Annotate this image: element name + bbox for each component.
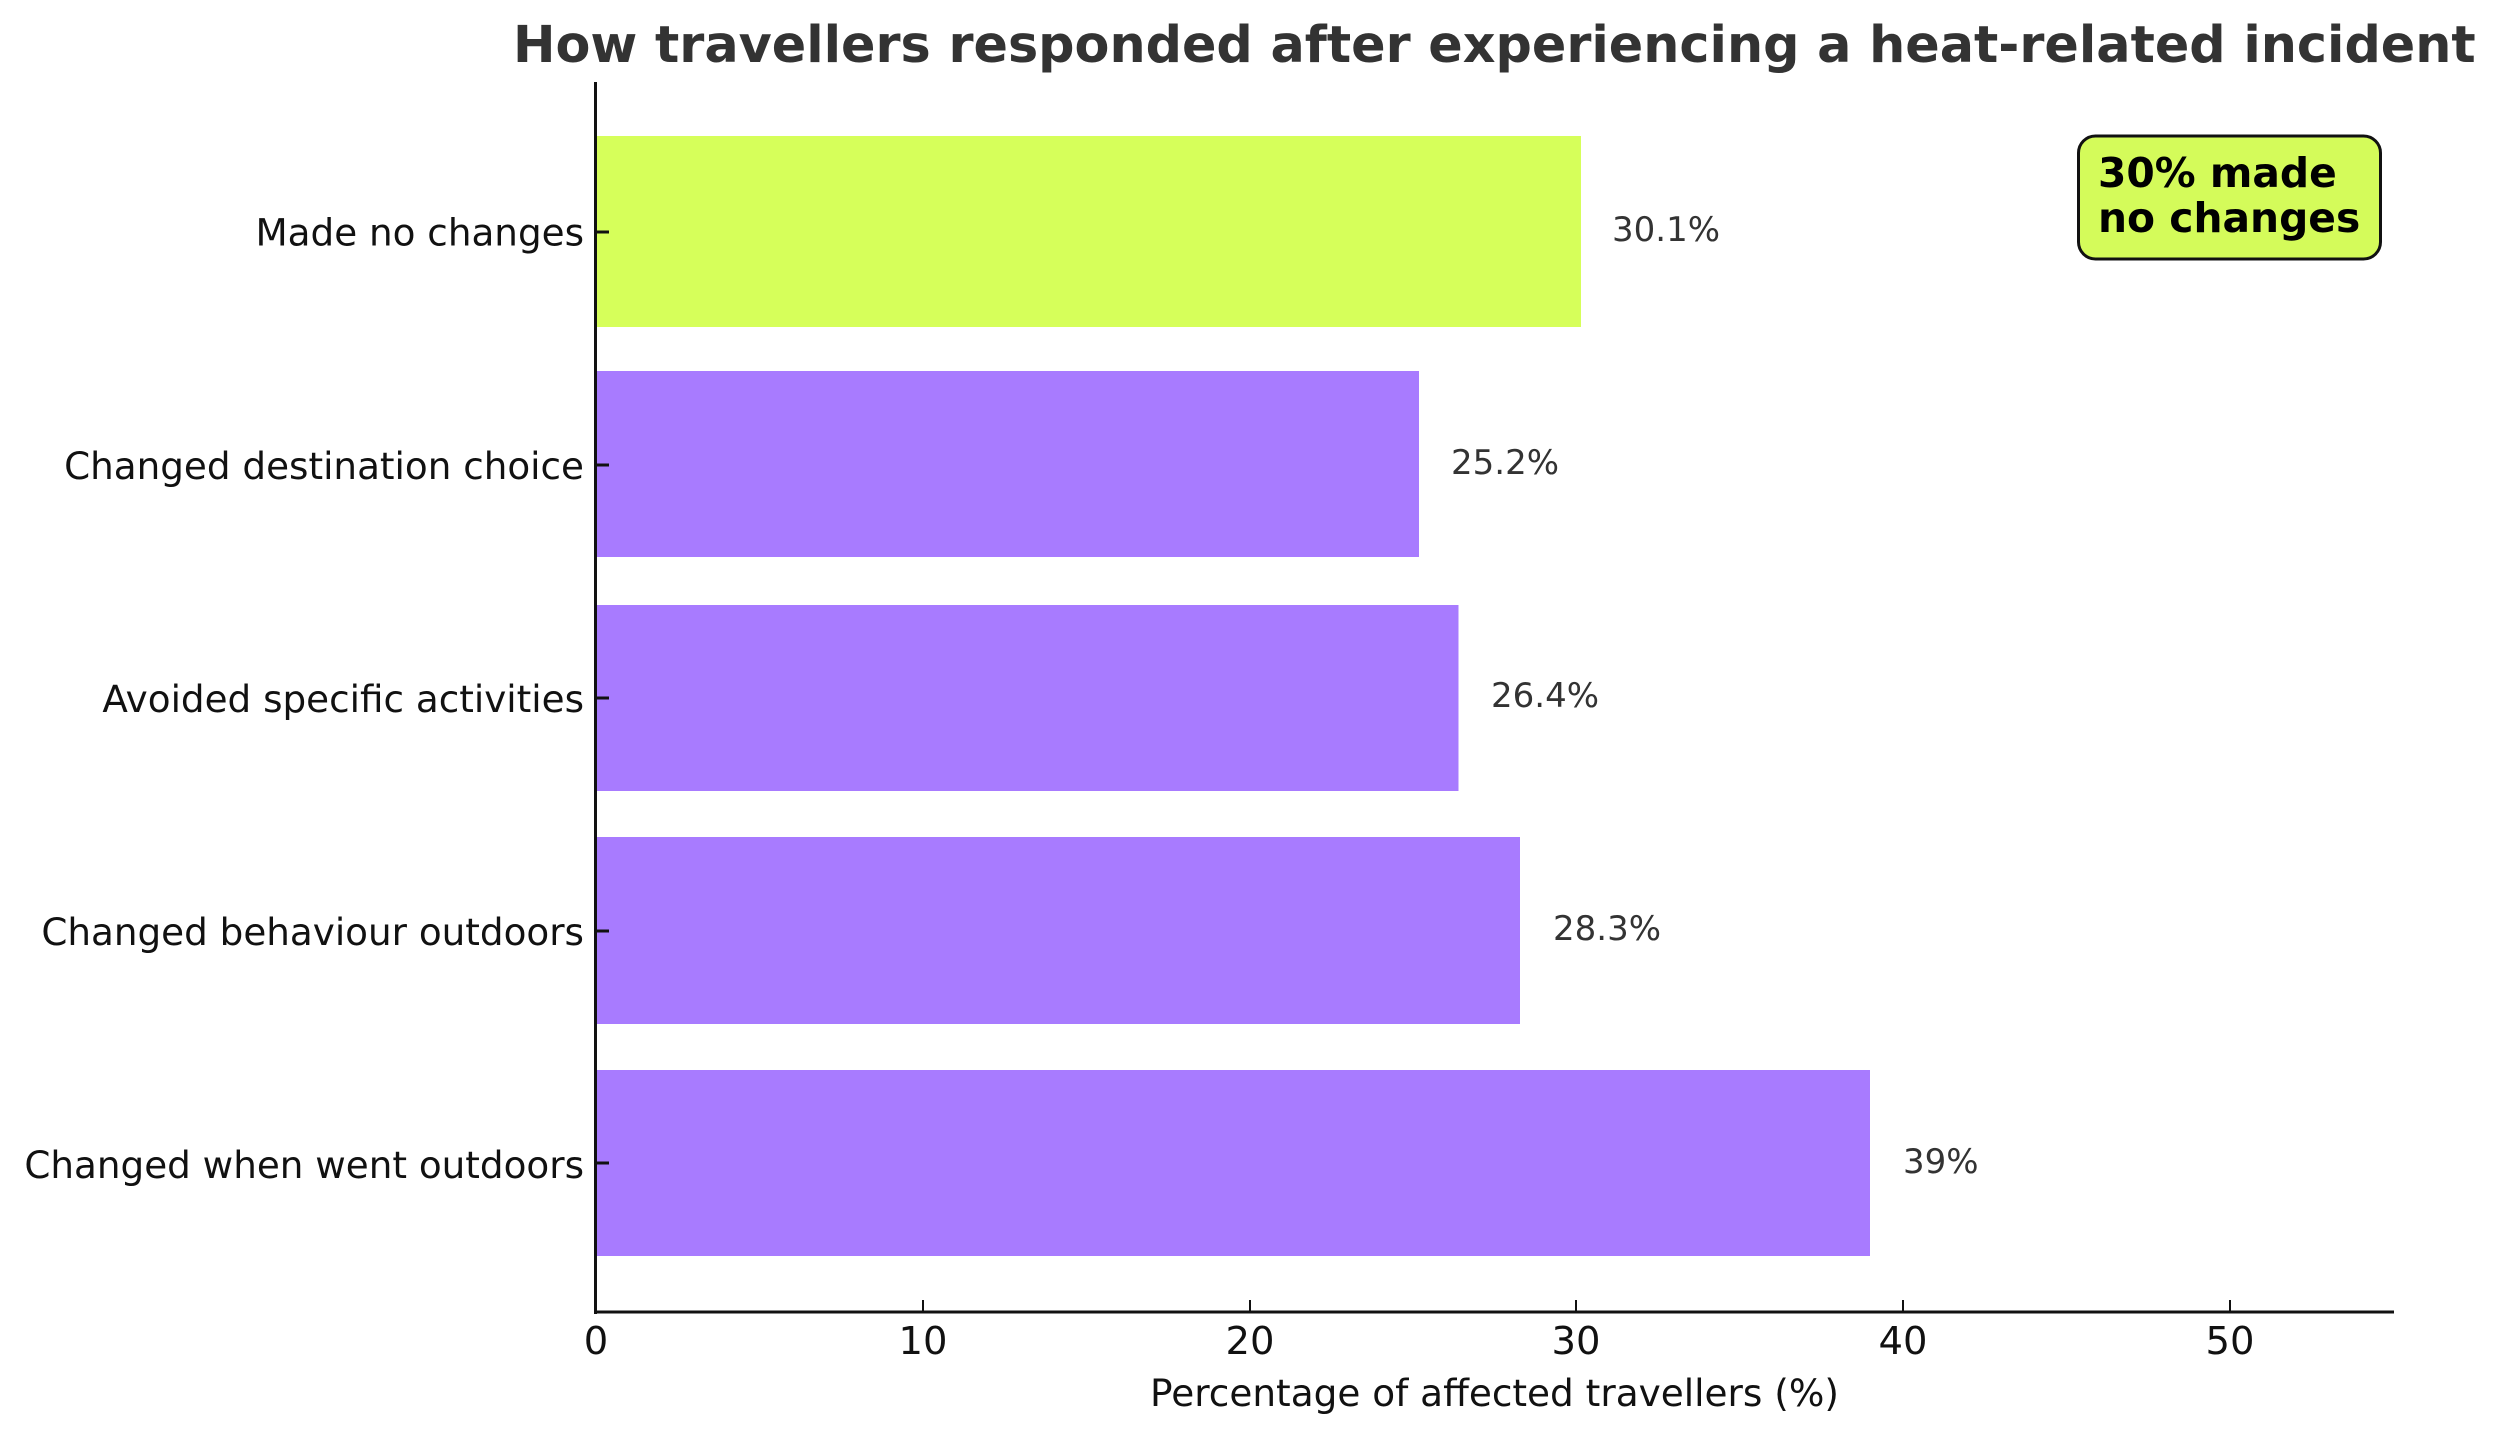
callout: 30% made [2098,149,2337,197]
y axis with category labels [24,82,609,1314]
bar: Changed when went outdoors [596,1070,1979,1256]
bar: Changed destination choice [596,371,1559,557]
x axis with tick labels [584,1300,2394,1364]
y axis with category labels: Avoided specific activities [102,677,584,721]
callout [2078,136,2380,259]
x axis with tick labels: 10 [898,1319,948,1364]
x axis with tick labels: 30 [1552,1319,1600,1364]
bar: Changed destination choice: 25.2% [1451,443,1559,483]
callout: no changes [2098,194,2360,242]
bar: Made no changes: 30.1% [1612,210,1720,250]
y axis with category labels: Changed when went outdoors [24,1143,584,1187]
x axis with tick labels: 20 [1226,1319,1274,1364]
y axis with category labels: Changed behaviour outdoors [41,910,584,954]
x axis with tick labels: 40 [1878,1319,1928,1364]
x axis title: Percentage of affected travellers (%) [1150,1371,1839,1415]
bar: Changed when went outdoors: 39% [1903,1142,1979,1182]
bar: Changed behaviour outdoors [596,837,1661,1024]
y axis with category labels: Changed destination choice [64,444,584,488]
bar: Made no changes [596,136,1720,327]
title: How travellers responded after experiencing a heat-related incident [513,15,2476,74]
x axis with tick labels: 50 [2206,1319,2254,1364]
bar: Avoided specific activities [596,605,1599,791]
bar: Avoided specific activities: 26.4% [1491,676,1599,716]
x axis with tick labels: 0 [584,1319,608,1364]
bar: Changed behaviour outdoors: 28.3% [1553,909,1661,949]
y axis with category labels: Made no changes [255,210,584,254]
